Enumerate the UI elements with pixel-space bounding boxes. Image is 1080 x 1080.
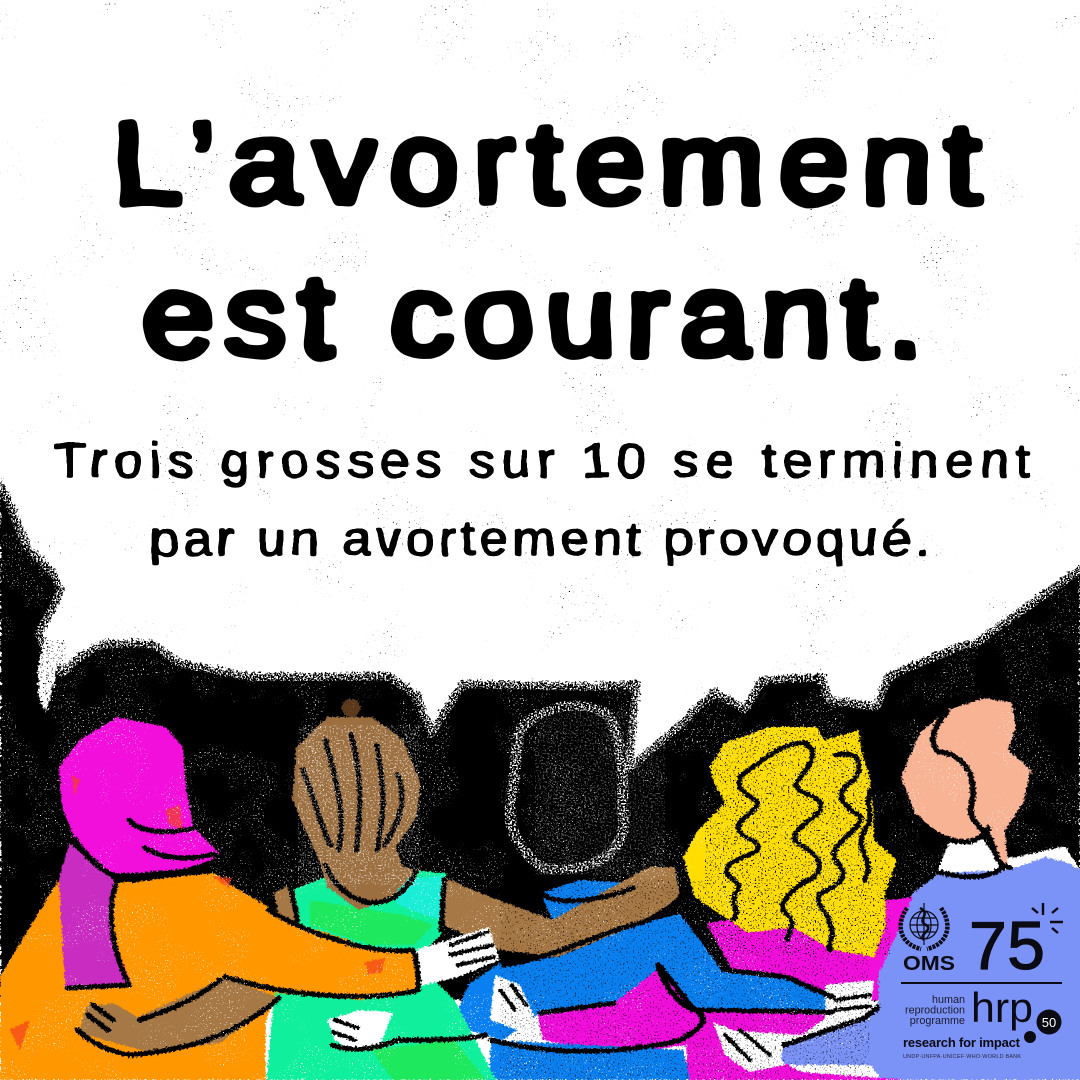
subtitle xyxy=(54,434,1030,566)
white chalk gap between left silhouettes xyxy=(38,640,60,712)
OMS wordmark: OMS xyxy=(903,953,955,975)
hrp wordmark: hrp xyxy=(971,984,1033,1031)
title: est courant. xyxy=(143,251,923,381)
hrp wordmark: reproduction xyxy=(905,1004,965,1016)
peach head of woman 5 xyxy=(901,698,1031,867)
white chalk flecks on brown hair xyxy=(298,725,420,885)
title xyxy=(112,98,980,381)
woman 2: head and neck xyxy=(274,699,420,925)
sponsors line: UNDP·UNFPA·UNICEF·WHO·WORLD BANK xyxy=(903,1054,1021,1060)
black crowd silhouette xyxy=(0,478,1080,1000)
hrp wordmark: human xyxy=(932,994,965,1006)
logos panel xyxy=(901,903,1063,1060)
woman 4: yellow curly hair xyxy=(683,727,897,957)
white hands xyxy=(327,927,874,1072)
woman 3: blue top xyxy=(451,880,832,1080)
black outlines: right figures xyxy=(491,712,1010,1051)
woman 4: magenta top xyxy=(537,897,913,1080)
woman 2: green top xyxy=(267,870,496,1080)
chalk speckle over figures xyxy=(0,700,870,1080)
woman 1: red chalk accents xyxy=(10,775,385,1050)
hrp wordmark: programme xyxy=(910,1015,965,1027)
dark specks in the chalk gap xyxy=(30,640,66,720)
woman 1: magenta headscarf xyxy=(59,717,219,987)
research for impact: research for impact xyxy=(903,1035,1021,1050)
woman 1: orange top xyxy=(0,873,418,1080)
divider xyxy=(901,982,1062,984)
subtitle: Trois grosses sur 10 se terminent xyxy=(54,434,1030,488)
subtitle: par un avortement provoqué. xyxy=(150,512,930,566)
speckle on yellow hair xyxy=(705,730,890,955)
white chalk flecks on dark head xyxy=(535,710,665,875)
white chalk grain along silhouette edge xyxy=(0,478,1080,760)
illustration: group of five women from behind xyxy=(0,698,1080,1080)
finger strokes xyxy=(333,932,870,1060)
woman 3: dark head with chalk outline xyxy=(510,705,624,870)
brown arm around woman 1 xyxy=(80,977,279,1053)
white speckle on the silhouette xyxy=(0,480,1080,1080)
hrp wordmark xyxy=(905,984,1062,1043)
chalk flecks on peach head xyxy=(910,705,1030,835)
hair curls xyxy=(727,743,870,950)
woman 5: collar and periwinkle top xyxy=(778,838,1080,1080)
title: L’avortement xyxy=(112,98,980,228)
hrp wordmark: 50 xyxy=(1042,1015,1056,1030)
75 anniversary mark: 75 xyxy=(969,908,1045,984)
woman 2: brown arm reaching right xyxy=(444,867,680,957)
paper speckle texture xyxy=(0,0,1080,690)
black outlines: left figures xyxy=(67,735,486,1055)
icon: WHO emblem xyxy=(901,903,947,949)
